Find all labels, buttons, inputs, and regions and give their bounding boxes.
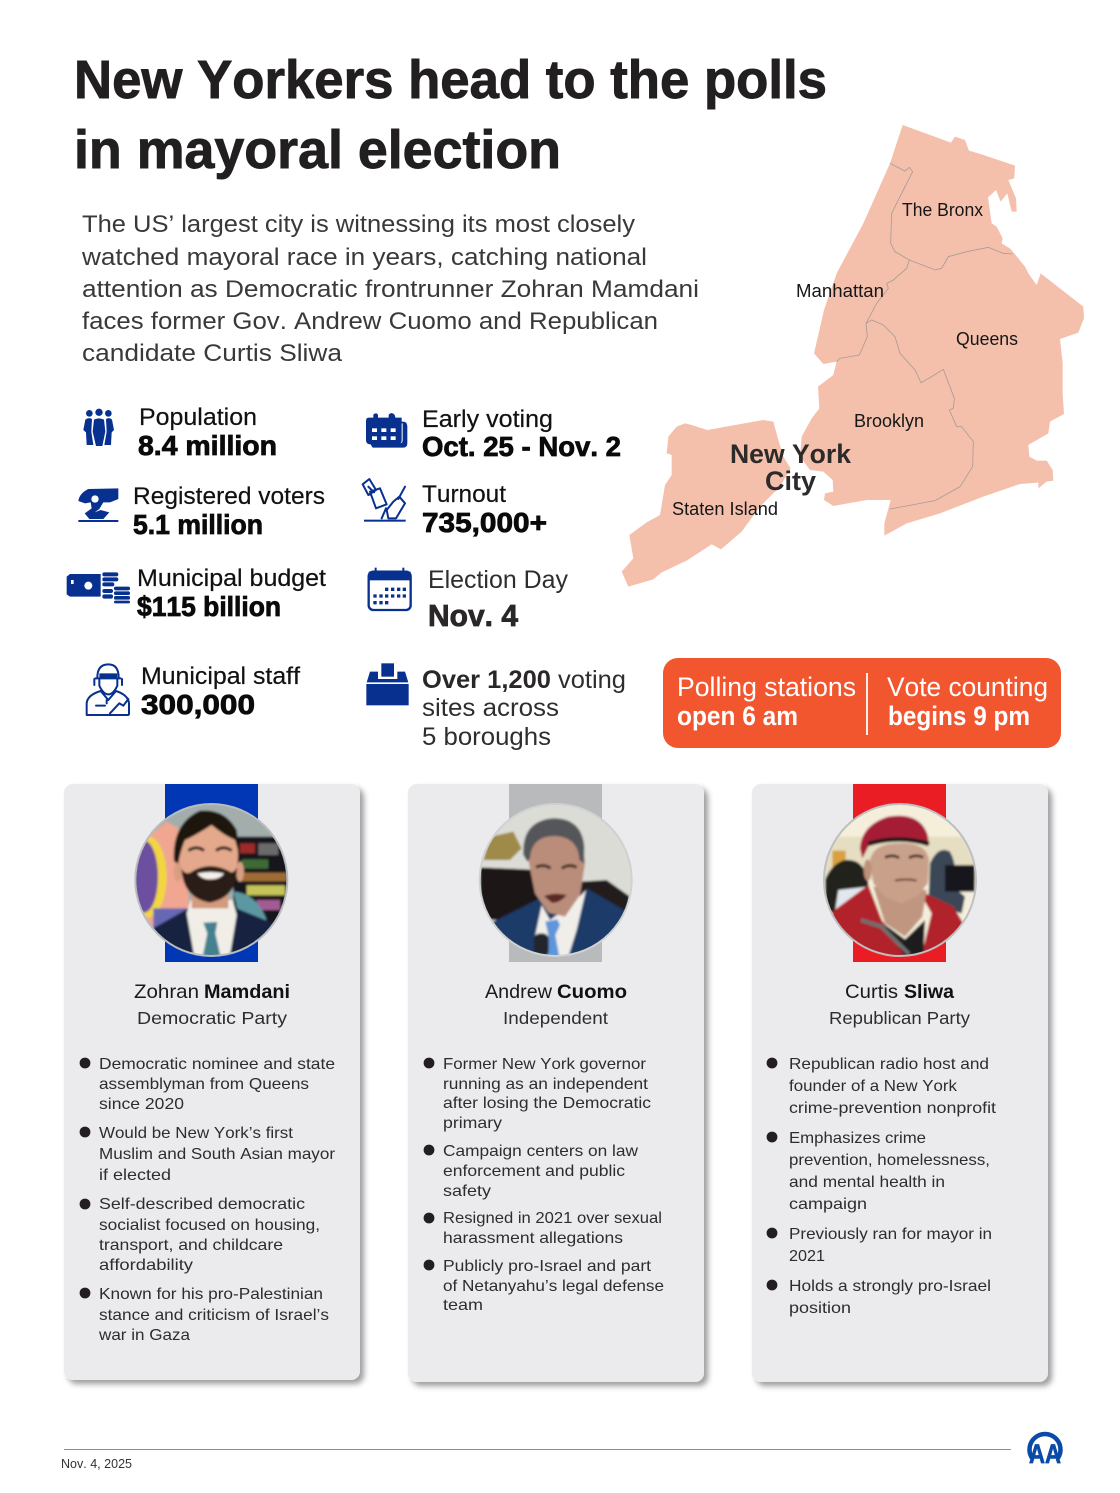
stat: election day: Election Day (428, 566, 568, 594)
stat: registered voters: Registered voters (133, 483, 325, 510)
icon: ballot and pen (363, 479, 406, 522)
candidate name (845, 981, 954, 1003)
bullet list: Campaign centers on law (443, 1143, 638, 1160)
intro text: faces former Gov. Andrew Cuomo and Republican (82, 308, 658, 335)
bullet list: stance and criticism of Israel’s (99, 1307, 329, 1324)
stat: municipal budget: Municipal budget (137, 565, 326, 592)
stat: municipal staff: 300,000 (141, 689, 255, 720)
stat: municipal budget: $115 billion (137, 591, 281, 622)
footer date: Nov. 4, 2025 (61, 1457, 132, 1471)
stat: turnout: Turnout (422, 481, 506, 508)
stat: population (83, 404, 277, 461)
bullet list: Emphasizes crime (789, 1130, 926, 1147)
candidate name (485, 981, 627, 1003)
bullet list: safety (443, 1183, 491, 1200)
intro text: watched mayoral race in years, catching national (81, 244, 647, 271)
map title: New York City (730, 439, 852, 496)
bullet list: Former New York governor (443, 1056, 647, 1073)
bullet list: since 2020 (99, 1096, 184, 1113)
stat: turnout (363, 479, 547, 538)
stat: election day: Nov. 4 (428, 598, 519, 633)
bullet list: Democratic nominee and state (99, 1056, 335, 1073)
bullet list: socialist focused on housing, (99, 1217, 320, 1234)
candidate name: Andrew (485, 981, 553, 1003)
candidate name: Mamdani (204, 981, 290, 1003)
candidate name: Cuomo (557, 981, 627, 1003)
party: Democratic Party (137, 1008, 287, 1028)
bullet list (767, 1056, 997, 1317)
stat: population: Population (139, 404, 257, 431)
icon: calendar (369, 568, 411, 610)
bullet list: affordability (99, 1257, 193, 1274)
bullet list: primary (443, 1115, 502, 1132)
bullet list: enforcement and public (443, 1163, 625, 1180)
logo: AA: AA (1029, 1439, 1061, 1469)
candidate name: Zohran (134, 981, 199, 1003)
panel: Zohran Mamdani (64, 784, 360, 1380)
map label: The Bronx: The Bronx (902, 200, 983, 220)
map: New York City boroughs (622, 125, 1084, 587)
bullet list: Muslim and South Asian mayor (99, 1146, 336, 1163)
bullet list: of Netanyahu’s legal defense (443, 1278, 664, 1295)
callout: polling hours: open 6 am (677, 701, 798, 731)
bullet list: Publicly pro-Israel and part (443, 1258, 652, 1275)
callout: polling hours (663, 658, 1061, 748)
panel: Curtis Sliwa (752, 784, 1048, 1382)
bullet list: transport, and childcare (99, 1237, 283, 1254)
candidate name (134, 981, 290, 1003)
portrait: Andrew Cuomo (478, 803, 633, 957)
bullet list: Previously ran for mayor in (789, 1226, 992, 1243)
bullet list: Republican radio host and (789, 1056, 989, 1073)
title: New Yorkers head to the polls (74, 50, 827, 110)
bullet list: Holds a strongly pro-Israel (789, 1278, 991, 1295)
intro text: candidate Curtis Sliwa (82, 340, 343, 367)
stat: population: 8.4 million (138, 430, 277, 461)
stat: registered voters: 5.1 million (133, 509, 263, 540)
bullet list: after losing the Democratic (443, 1095, 651, 1112)
stat: municipal staff (87, 663, 300, 720)
icon: worker (87, 664, 129, 715)
bullet list: founder of a New York (789, 1078, 958, 1095)
title (74, 50, 827, 180)
stat: municipal staff: Municipal staff (141, 663, 300, 690)
bullet list: team (443, 1297, 483, 1314)
icon: desk calendar (366, 413, 407, 448)
stat: turnout: 735,000+ (422, 507, 547, 538)
icon: hand casting ballot (78, 488, 118, 522)
icon: cash and coins (67, 572, 130, 603)
bullet list: war in Gaza (98, 1327, 190, 1344)
stat: early voting: Oct. 25 - Nov. 2 (422, 431, 621, 462)
bullet list: campaign (789, 1196, 867, 1213)
icon: ballot box (366, 663, 409, 705)
bullet list: harassment allegations (443, 1230, 623, 1247)
intro text: attention as Democratic frontrunner Zohran Mamdani (82, 276, 699, 303)
bullet list: assemblyman from Queens (99, 1076, 309, 1093)
candidate name: Sliwa (904, 981, 954, 1003)
callout: polling hours: Polling stations (677, 672, 856, 702)
panel: Andrew Cuomo (408, 784, 704, 1382)
stat: early voting (366, 406, 621, 462)
party colour band: gray (509, 784, 602, 962)
callout: polling hours: begins 9 pm (888, 701, 1030, 731)
party: Independent (503, 1008, 608, 1028)
intro text (81, 211, 699, 367)
bullet list (80, 1056, 336, 1344)
map label: Queens: Queens (956, 329, 1018, 349)
map label: Manhattan: Manhattan (796, 281, 884, 301)
party colour band: red (853, 784, 946, 962)
bullet list: position (789, 1300, 851, 1317)
stat: voting sites: sites across (422, 694, 559, 722)
stat: voting sites: 5 boroughs (422, 723, 551, 751)
bullet list: and mental health in (789, 1174, 945, 1191)
stat: voting sites (366, 663, 626, 751)
candidate name: Curtis (845, 981, 898, 1003)
callout: polling hours: Vote counting (887, 672, 1048, 702)
bullet list: if elected (99, 1167, 171, 1184)
bullet list: crime-prevention nonprofit (789, 1100, 997, 1117)
bullet list: Resigned in 2021 over sexual (443, 1210, 662, 1227)
map title: New York City: City (765, 466, 816, 496)
map title: New York City: New York (730, 439, 852, 469)
map label: Staten Island: Staten Island (672, 499, 778, 519)
bullet list (424, 1056, 664, 1314)
stat: voting sites: Over 1,200 voting (422, 666, 626, 694)
portrait: Zohran Mamdani (134, 803, 288, 957)
stat: registered voters (78, 483, 325, 540)
stat: early voting: Early voting (422, 406, 553, 433)
bullet list: 2021 (789, 1248, 825, 1265)
bullet list: Self-described democratic (99, 1196, 305, 1213)
stat: municipal budget (67, 565, 326, 622)
icon: people (83, 409, 114, 446)
portrait: Curtis Sliwa (823, 803, 977, 957)
party colour band: blue (165, 784, 258, 962)
bullet list: prevention, homelessness, (789, 1152, 990, 1169)
map shape: boroughs (622, 125, 1084, 587)
bullet list: Known for his pro-Palestinian (99, 1286, 323, 1303)
party: Republican Party (829, 1008, 970, 1028)
bullet list: running as an independent (443, 1076, 649, 1093)
map label: Brooklyn: Brooklyn (854, 411, 924, 431)
intro text: The US’ largest city is witnessing its most closely (82, 211, 635, 238)
title: in mayoral election (74, 120, 561, 180)
bullet list: Would be New York’s first (99, 1125, 294, 1142)
stat: election day (369, 566, 568, 633)
